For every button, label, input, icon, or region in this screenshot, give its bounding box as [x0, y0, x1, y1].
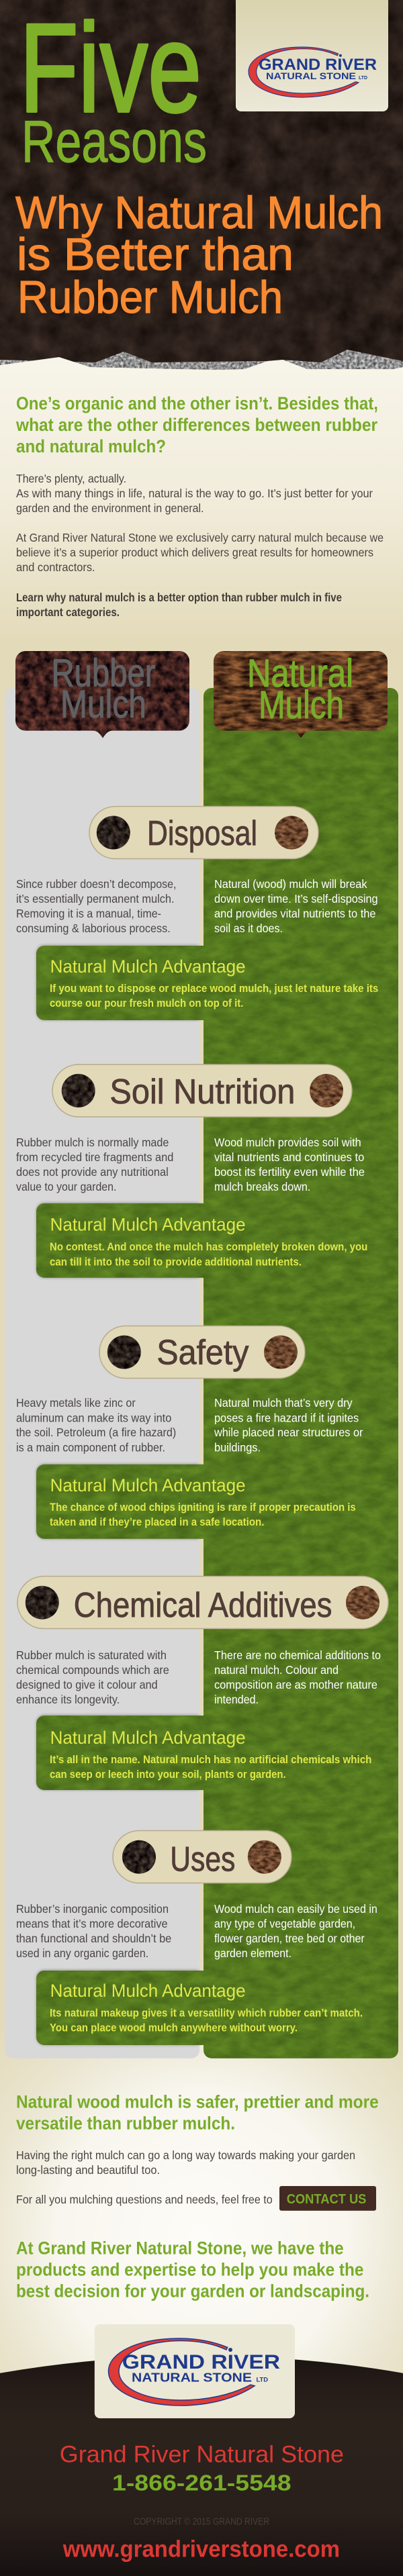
intro body text: There’s plenty, actually. — [16, 472, 126, 485]
closing body text: long-lasting and beautiful too. — [16, 2163, 160, 2177]
title: Five Reasons: Reasons — [21, 108, 207, 175]
page background — [0, 644, 403, 2403]
text: natural disposal: and provides vital nutrients to the — [214, 907, 376, 920]
text: natural disposal: soil as it does. — [214, 922, 283, 935]
text: rubber chemical additives: designed to give it colour and — [16, 1678, 158, 1691]
header: rubber mulch — [15, 651, 189, 738]
text: natural soil nutrition: Wood mulch provides soil with — [214, 1136, 361, 1149]
text: natural disposal: down over time. It’s self-disposing — [214, 892, 378, 905]
callout: safety advantage: The chance of wood chips igniting is rare if proper precaution is — [50, 1501, 356, 1514]
text: rubber soil nutrition: Rubber mulch is normally made — [16, 1136, 169, 1149]
footer: website: www.grandriverstone.com — [62, 2536, 340, 2563]
intro body text: As with many things in life, natural is the way to go. It’s just better for your — [16, 487, 373, 500]
text: rubber disposal — [16, 877, 176, 935]
footer: phone number: 1-866-261-5548 — [112, 2471, 292, 2495]
section: chemical additives — [16, 1576, 388, 1790]
callout: uses advantage — [36, 1970, 363, 2045]
closing statement — [16, 2238, 369, 2301]
section: safety — [16, 1326, 363, 1539]
text: natural uses: Wood mulch can easily be used in — [214, 1902, 377, 1916]
title: Five Reasons: Five — [19, 0, 202, 138]
callout: soil nutrition advantage — [36, 1203, 367, 1278]
text: natural safety — [214, 1396, 363, 1454]
closing body text: For all you mulching questions and needs, feel free to — [16, 2193, 273, 2206]
text: rubber chemical additives: enhance its longevity. — [16, 1693, 120, 1706]
text: rubber soil nutrition — [16, 1136, 173, 1193]
text: natural chemical additives — [214, 1648, 381, 1706]
text: natural soil nutrition: vital nutrients and continues to — [214, 1150, 364, 1164]
callout: uses advantage: Its natural makeup gives it a versatility which rubber can’t match. — [50, 2006, 363, 2019]
text: natural uses: flower garden, tree bed or other — [214, 1932, 365, 1945]
intro body text: important categories. — [16, 605, 120, 619]
subtitle: why natural mulch: Rubber Mulch — [17, 272, 283, 323]
callout: safety advantage — [36, 1464, 356, 1539]
text: rubber safety: is a main component of rubber. — [16, 1440, 165, 1454]
intro body text: garden and the environment in general. — [16, 501, 204, 515]
title: Five Reasons — [19, 0, 207, 175]
intro body text — [16, 472, 384, 619]
pill heading: uses — [113, 1831, 292, 1883]
callout: soil nutrition advantage: Natural Mulch Advantage — [50, 1215, 246, 1235]
callout: disposal advantage: course our pour fresh mulch on top of it. — [50, 997, 243, 1009]
callout: chemical additives advantage — [36, 1715, 371, 1790]
callout: safety advantage: Natural Mulch Advantage — [50, 1475, 246, 1495]
intro heading — [15, 393, 378, 456]
text: natural disposal: Natural (wood) mulch will break — [214, 877, 367, 891]
closing statement: products and expertise to help you make the — [16, 2259, 364, 2279]
text: rubber disposal: consuming & laborious process. — [16, 922, 171, 935]
callout: soil nutrition advantage: can till it into the soil to provide additional nutrients. — [50, 1255, 302, 1268]
text: rubber uses — [16, 1902, 171, 1960]
intro body text: Learn why natural mulch is a better option than rubber mulch in five — [16, 591, 342, 604]
intro heading: what are the other differences between rubber — [15, 415, 377, 435]
logo card: bottom — [95, 2324, 295, 2418]
text: rubber soil nutrition: value to your garden. — [16, 1180, 116, 1193]
intro body text: believe it’s a superior product which delivers great results for homeowners — [16, 546, 373, 559]
header: natural mulch: Natural — [247, 652, 353, 695]
text: rubber safety — [16, 1396, 176, 1454]
section: uses — [16, 1831, 377, 2045]
closing heading: versatile than rubber mulch. — [16, 2114, 235, 2134]
text: natural safety: poses a fire hazard if it ignites — [214, 1411, 359, 1424]
text: natural chemical additives: composition are as mother nature — [214, 1678, 377, 1691]
pill heading: soil nutrition — [52, 1064, 352, 1117]
header: natural mulch — [214, 651, 388, 738]
callout: chemical additives advantage: can seep or leech into your soil, plants or garden. — [50, 1768, 286, 1781]
logo card: top: NATURAL STONE — [266, 70, 356, 81]
text: rubber soil nutrition: from recycled tire fragments and — [16, 1150, 173, 1164]
pill heading: soil nutrition: Soil Nutrition — [109, 1073, 295, 1111]
closing statement: At Grand River Natural Stone, we have the — [16, 2238, 344, 2258]
closing heading — [16, 2092, 379, 2134]
text: natural safety: buildings. — [214, 1440, 261, 1454]
text: natural uses: any type of vegetable garden, — [214, 1917, 355, 1930]
pill heading: safety: Safety — [156, 1334, 249, 1373]
text: natural safety: Natural mulch that’s very dry — [214, 1396, 353, 1409]
text: rubber safety: the soil. Petroleum (a fire hazard) — [16, 1426, 176, 1439]
logo card: bottom: NATURAL STONE — [132, 2371, 252, 2385]
closing statement: best decision for your garden or landscaping. — [16, 2281, 369, 2301]
pill heading: uses: Uses — [170, 1840, 235, 1879]
callout: disposal advantage: Natural Mulch Advantage — [50, 956, 246, 977]
text: rubber uses: Rubber’s inorganic composition — [16, 1902, 169, 1916]
text: rubber chemical additives: Rubber mulch is saturated with — [16, 1648, 167, 1662]
logo card: bottom: GRAND RIVER — [122, 2351, 280, 2373]
pill heading: chemical additives — [17, 1576, 388, 1628]
callout: safety advantage: taken and if they’re placed in a safe location. — [50, 1516, 264, 1528]
button: contact us: CONTACT US — [287, 2192, 366, 2207]
footer: copyright: COPYRIGHT © 2015 GRAND RIVER — [134, 2516, 269, 2527]
subtitle: why natural mulch: Why Natural Mulch — [15, 187, 383, 238]
pill heading: disposal — [89, 807, 318, 859]
header: natural mulch: Mulch — [259, 683, 344, 727]
text: natural disposal — [214, 877, 378, 935]
text: natural soil nutrition: mulch breaks down. — [214, 1180, 310, 1193]
text: natural soil nutrition — [214, 1136, 365, 1193]
text: rubber chemical additives — [16, 1648, 169, 1706]
text: natural safety: while placed near structures or — [214, 1426, 363, 1439]
logo card: top: GRAND RIVER — [259, 56, 377, 74]
callout: chemical additives advantage: It’s all in the name. Natural mulch has no artificial chemicals which — [50, 1753, 371, 1766]
callout: uses advantage: Natural Mulch Advantage — [50, 1981, 246, 2001]
pill heading: safety — [99, 1326, 305, 1379]
intro body text: and contractors. — [16, 560, 95, 574]
closing body text: Having the right mulch can go a long way towards making your garden — [16, 2148, 355, 2162]
text: natural soil nutrition: boost its fertility even while the — [214, 1165, 365, 1179]
subtitle: why natural mulch: is Better than — [17, 229, 294, 280]
header: dark soil band — [0, 0, 403, 646]
panel: rubber mulch column — [5, 688, 199, 2059]
callout: disposal advantage — [36, 945, 378, 1020]
callout: uses advantage: You can place wood mulch anywhere without worry. — [50, 2022, 298, 2034]
pill heading: chemical additives: Chemical Additives — [74, 1586, 332, 1625]
logo card: top — [236, 0, 388, 111]
callout: chemical additives advantage: Natural Mulch Advantage — [50, 1728, 246, 1748]
text: natural uses: garden element. — [214, 1946, 292, 1960]
text: rubber safety: Heavy metals like zinc or — [16, 1396, 136, 1409]
callout: soil nutrition advantage: No contest. And once the mulch has completely broken down, you — [50, 1240, 367, 1253]
text: rubber soil nutrition: does not provide any nutritional — [16, 1165, 169, 1179]
logo card: top: LTD — [359, 76, 367, 81]
text: natural chemical additives: intended. — [214, 1693, 259, 1706]
text: rubber chemical additives: chemical compounds which are — [16, 1663, 169, 1677]
text: rubber safety: aluminum can make its way into — [16, 1411, 171, 1424]
footer: company name: Grand River Natural Stone — [60, 2442, 344, 2468]
text: rubber disposal: it’s essentially permanent mulch. — [16, 892, 175, 905]
text: rubber disposal: Since rubber doesn’t decompose, — [16, 877, 176, 891]
header: rubber mulch: Mulch — [60, 683, 146, 726]
text: rubber uses: than functional and shouldn’t be — [16, 1932, 171, 1945]
subtitle: why natural mulch — [15, 187, 383, 323]
text: natural chemical additives: There are no chemical additions to — [214, 1648, 381, 1662]
intro heading: and natural mulch? — [16, 436, 166, 456]
header: rubber mulch: Rubber — [51, 651, 156, 695]
text: natural chemical additives: natural mulch. Colour and — [214, 1663, 339, 1677]
pill heading: disposal: Disposal — [147, 814, 257, 853]
panel: natural mulch column — [204, 688, 398, 2059]
footer: dark band — [0, 2356, 403, 2576]
text: rubber uses: used in any organic garden. — [16, 1946, 148, 1960]
text: rubber uses: means that it’s more decorative — [16, 1917, 168, 1930]
logo card: bottom: LTD — [257, 2377, 269, 2383]
closing body text — [16, 2148, 355, 2206]
button: contact us — [279, 2186, 376, 2211]
section: disposal — [16, 807, 378, 1020]
text: rubber disposal: Removing it is a manual, time- — [16, 907, 161, 920]
text: natural uses — [214, 1902, 377, 1960]
section: soil nutrition — [16, 1064, 367, 1278]
